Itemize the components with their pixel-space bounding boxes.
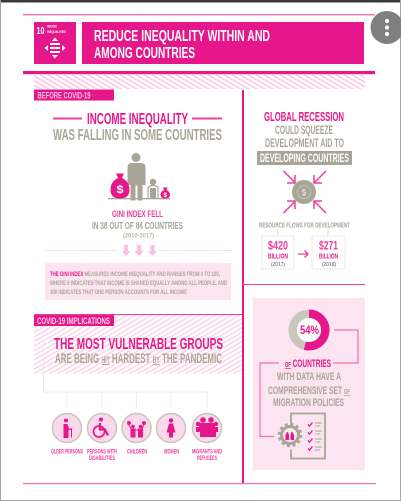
- flow card: 2017: (2017): [271, 262, 285, 268]
- goal 10 badge: REDUCED: [47, 24, 57, 28]
- group labels: WOMEN: [164, 450, 179, 456]
- group labels: PERSONS WITH: [87, 450, 117, 456]
- goal 10 badge: INEQUALITIES: [47, 30, 67, 34]
- goal 10 badge: 10: [36, 26, 45, 37]
- heading: global recession: DEVELOPMENT AID TO: [265, 136, 344, 150]
- flow card: 2017: [262, 236, 294, 269]
- bottom rule: [23, 483, 376, 484]
- column divider: [242, 90, 244, 484]
- callout: gini definition: 100 INDICATES THAT ONE PERSON ACCOUNTS FOR ALL INCOME: [50, 289, 187, 296]
- callout: gini definition: [45, 263, 231, 300]
- icon: coin with inward arrows: [284, 171, 326, 213]
- group labels: CHILDREN: [127, 450, 147, 456]
- section rule right: [243, 284, 365, 285]
- group labels: MIGRANTS AND: [192, 450, 222, 456]
- section label: covid-19 implications: [34, 315, 114, 326]
- hatch band: [34, 75, 365, 89]
- heading: income inequality: [53, 111, 222, 144]
- flow card: 2018: [312, 236, 345, 269]
- stat: gini index fell: IN 38 OUT OF 84 COUNTRIES: [92, 220, 183, 232]
- icon: coin with inward arrows: $: [302, 188, 306, 198]
- flow card: 2018: BILLION: [319, 252, 338, 260]
- arrow: flow decline: [298, 250, 308, 258]
- section label: covid-19 implications: COVID-19 IMPLICATIONS: [37, 316, 110, 326]
- migration text: MIGRATION POLICIES: [273, 397, 344, 409]
- hatch band: covid section: [34, 314, 242, 374]
- heading: global recession: [257, 109, 352, 165]
- group labels: [51, 450, 222, 462]
- heading: income inequality: WAS FALLING IN SOME COUNTRIES: [53, 127, 222, 144]
- heading: global recession: COULD SQUEEZE: [275, 123, 333, 137]
- icon: persons with disabilities: [88, 414, 116, 442]
- heading: most vulnerable groups: [54, 336, 223, 366]
- title banner: REDUCE INEQUALITY WITHIN AND: [94, 28, 270, 45]
- callout: gini definition: THE GINI INDEX MEASURES INCOME INEQUALITY AND RANGES FROM 0 TO 100,: [50, 271, 220, 278]
- icon: women: [156, 414, 186, 442]
- top rule: [23, 14, 375, 15]
- donut chart: 54%: 54%: [300, 325, 319, 337]
- migration text: COMPREHENSIVE SET OF: [268, 385, 350, 397]
- flow card: 2018: (2018): [322, 262, 336, 268]
- group labels: REFUGEES: [197, 456, 217, 462]
- flow card: 2017: BILLION: [268, 252, 288, 260]
- donut chart: 54%: [293, 314, 325, 346]
- icon: adult and child with money bags: $: [116, 184, 124, 196]
- icon: policy checklist with gear: [279, 414, 325, 458]
- icon: children: [122, 414, 151, 442]
- stat: gini index fell: (2010-2017): [123, 232, 154, 240]
- dotted divider with arrows: [45, 245, 232, 256]
- bracket connectors: [260, 330, 358, 436]
- migration text: [268, 358, 350, 409]
- heading: income inequality: INCOME INEQUALITY: [87, 111, 188, 128]
- flow card: 2017: $420: [268, 238, 288, 252]
- icon: older persons: [52, 414, 82, 442]
- title banner: [82, 22, 364, 64]
- thick rule: [23, 71, 375, 74]
- overlay menu button: [370, 11, 401, 44]
- group labels: OLDER PERSONS: [51, 450, 83, 456]
- stat: gini index fell: GINI INDEX FELL: [112, 209, 163, 220]
- heading: global recession: GLOBAL RECESSION: [264, 109, 344, 124]
- migration text: WITH DATA HAVE A: [277, 371, 341, 383]
- stat: gini index fell: [92, 209, 183, 240]
- migration text: OF COUNTRIES: [285, 358, 331, 370]
- icon: migrants and refugees: [192, 414, 222, 442]
- flow card: 2018: $271: [319, 238, 338, 252]
- callout: gini definition: WHERE 0 INDICATES THAT INCOME IS SHARED EQUALLY AMONG ALL PEOPLE, AND: [50, 280, 227, 287]
- heading: most vulnerable groups: THE MOST VULNERABLE GROUPS: [54, 336, 223, 353]
- title banner: AMONG COUNTRIES: [94, 45, 195, 62]
- connector tree: [44, 343, 207, 408]
- section label: before covid-19: BEFORE COVID-19: [38, 90, 90, 100]
- heading: most vulnerable groups: ARE BEING HIT HARDEST BY THE PANDEMIC: [55, 350, 222, 366]
- group labels: DISABILITIES: [89, 456, 115, 462]
- goal 10 badge: [34, 22, 76, 64]
- icon: adult and child with money bags: $: [164, 193, 168, 199]
- panel: migration policies: [253, 298, 365, 470]
- resource flows: [259, 220, 350, 235]
- icon: adult and child with money bags: [108, 153, 170, 200]
- section rule: [34, 314, 242, 315]
